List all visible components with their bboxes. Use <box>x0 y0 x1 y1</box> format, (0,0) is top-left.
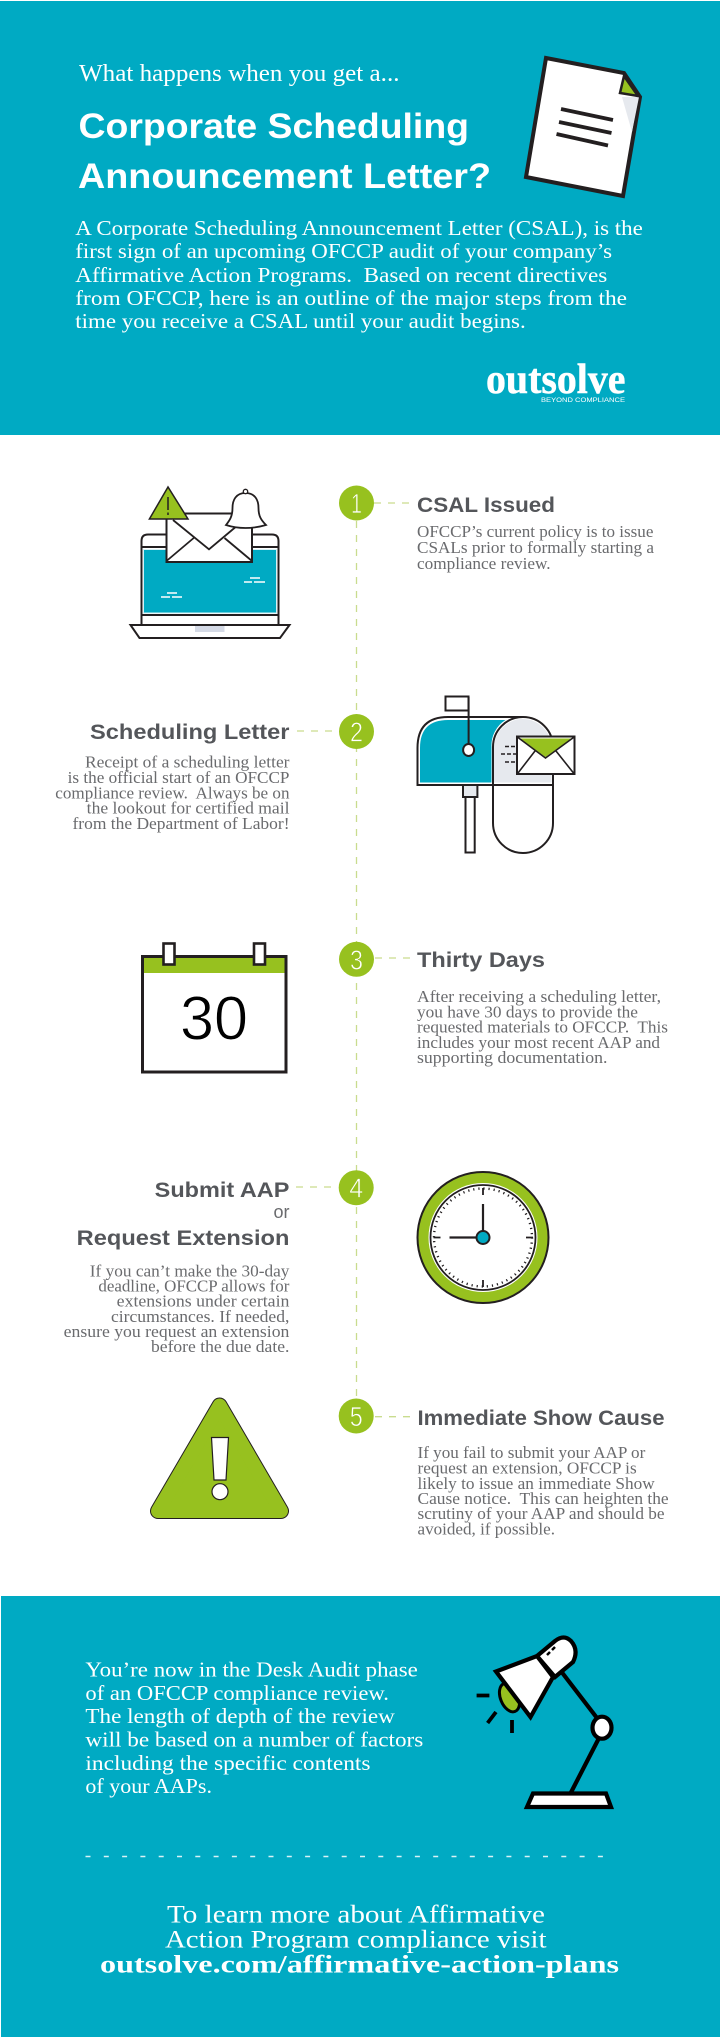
call to action <box>100 1900 619 1979</box>
text block: If you can’t make the 30-day <box>90 1262 290 1281</box>
text block: Receipt of a scheduling letter <box>85 753 290 772</box>
text block: CSALs prior to formally starting a <box>417 538 655 557</box>
text block <box>55 753 290 833</box>
icon: laptop with envelope <box>130 487 290 638</box>
text block: the lookout for certified mail <box>87 799 290 818</box>
icon: clock <box>418 1172 548 1303</box>
timeline connector <box>356 521 358 1399</box>
logo: outsolve: BEYOND COMPLIANCE <box>541 397 626 404</box>
connector dash <box>296 1186 338 1188</box>
desk audit paragraph: including the specific contents <box>85 1751 371 1775</box>
text block <box>417 987 668 1067</box>
intro paragraph <box>75 216 643 333</box>
number badge 4: 4 <box>349 1173 363 1204</box>
heading: Submit AAP <box>155 1179 289 1202</box>
icon: document <box>526 58 640 196</box>
text block: request an extension, OFCCP is <box>418 1459 637 1478</box>
logo: outsolve: outsolve <box>486 357 626 403</box>
icon: warning triangle <box>158 1406 281 1511</box>
desk audit paragraph: of an OFCCP compliance review. <box>85 1681 389 1705</box>
step 2: scheduling letter <box>55 696 575 853</box>
text block: from the Department of Labor! <box>72 814 290 833</box>
number badge 3 <box>339 942 374 977</box>
number badge 4 <box>339 1170 374 1205</box>
text block: likely to issue an immediate Show <box>418 1474 656 1493</box>
heading <box>77 1179 290 1250</box>
divider <box>86 1856 612 1858</box>
heading: Scheduling Letter <box>90 721 290 744</box>
intro paragraph: first sign of an upcoming OFCCP audit of your company’s <box>75 239 612 263</box>
desk audit paragraph <box>85 1658 423 1798</box>
number badge 5 <box>339 1398 374 1434</box>
number badge 2: 2 <box>350 716 363 748</box>
text block <box>417 522 655 573</box>
text block: circumstances. If needed, <box>111 1307 289 1326</box>
number badge 1: 1 <box>351 488 362 519</box>
step 1: CSAL issued <box>130 486 655 638</box>
text block: extensions under certain <box>117 1292 290 1311</box>
text block: OFCCP’s current policy is to issue <box>417 522 653 541</box>
heading: Thirty Days <box>417 949 545 972</box>
title: Announcement Letter? <box>78 156 491 196</box>
text block <box>418 1443 669 1539</box>
connector dash <box>375 1416 412 1418</box>
text block <box>64 1262 290 1356</box>
desk audit paragraph: of your AAPs. <box>85 1774 212 1798</box>
desk audit paragraph: You’re now in the Desk Audit phase <box>85 1658 418 1682</box>
intro paragraph: Affirmative Action Programs. Based on recent directives <box>75 263 607 287</box>
kicker line: What happens when you get a... <box>79 61 400 87</box>
text block: compliance review. Always be on <box>55 783 290 802</box>
text block: supporting documentation. <box>417 1048 608 1067</box>
heading: or <box>274 1202 290 1222</box>
desk audit paragraph: The length of depth of the review <box>85 1704 395 1728</box>
text block: Cause notice. This can heighten the <box>418 1489 669 1508</box>
step 4: submit AAP or request extension <box>64 1170 548 1356</box>
text block: requested materials to OFCCP. This <box>417 1018 668 1037</box>
text block: compliance review. <box>417 554 551 573</box>
call to action: outsolve.com/affirmative-action-plans <box>100 1950 619 1979</box>
connector dash <box>375 957 413 959</box>
panel: header <box>0 1 720 435</box>
text block: deadline, OFCCP allows for <box>98 1277 290 1296</box>
connector dash <box>374 502 412 504</box>
number badge 1 <box>339 486 374 520</box>
text block: you have 30 days to provide the <box>417 1003 638 1022</box>
step 5: immediate show cause <box>158 1398 669 1539</box>
text block: before the due date. <box>151 1337 289 1356</box>
intro paragraph: from OFCCP, here is an outline of the major steps from the <box>75 286 627 310</box>
title <box>78 106 491 196</box>
connector dash <box>297 730 338 732</box>
text block: ensure you request an extension <box>64 1322 290 1341</box>
text block: scrutiny of your AAP and should be <box>418 1504 664 1523</box>
text block: avoided, if possible. <box>418 1520 555 1539</box>
panel: footer <box>1 1596 720 2037</box>
intro paragraph: A Corporate Scheduling Announcement Letter (CSAL), is the <box>75 216 643 240</box>
heading: Immediate Show Cause <box>418 1407 664 1430</box>
heading: Request Extension <box>77 1227 289 1250</box>
number badge 3: 3 <box>350 944 363 975</box>
intro paragraph: time you receive a CSAL until your audit begins. <box>75 309 526 333</box>
heading: CSAL Issued <box>417 494 555 517</box>
icon: calendar <box>142 944 286 1072</box>
text block: After receiving a scheduling letter, <box>417 987 661 1006</box>
number badge 5: 5 <box>350 1401 363 1432</box>
text block: is the official start of an OFCCP <box>68 768 289 787</box>
number badge 2 <box>339 714 374 749</box>
call to action: To learn more about Affirmative <box>167 1900 545 1929</box>
text block: includes your most recent AAP and <box>417 1033 661 1052</box>
icon: desk lamp <box>477 1638 612 1807</box>
call to action: Action Program compliance visit <box>165 1925 546 1954</box>
text block: If you fail to submit your AAP or <box>418 1443 646 1462</box>
desk audit paragraph: will be based on a number of factors <box>85 1728 423 1752</box>
title: Corporate Scheduling <box>78 106 469 146</box>
step 3: thirty days <box>142 942 668 1072</box>
icon: calendar: 30 <box>180 984 248 1054</box>
icon: mailbox <box>416 696 574 853</box>
